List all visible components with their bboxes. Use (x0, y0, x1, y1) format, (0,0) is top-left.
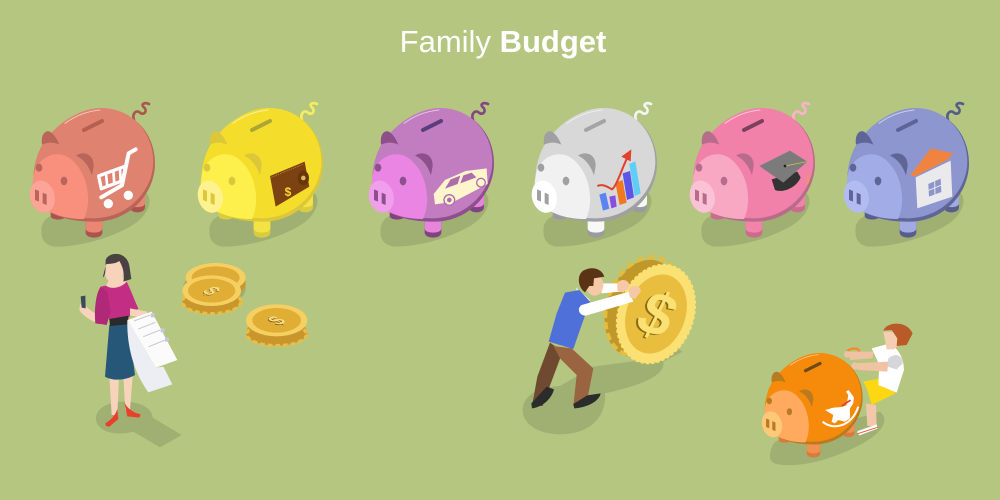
coins: two stacked gold coins: $ (197, 284, 226, 299)
piggy bank: house (periwinkle) (840, 103, 969, 247)
icon: growth chart (597, 149, 641, 211)
piggy bank: wallet (yellow) (194, 103, 323, 247)
piggy bank: education (pink) (686, 103, 815, 247)
icon: wallet (270, 162, 309, 207)
coin: single gold coin: $ (261, 314, 291, 328)
woman's shadow (96, 402, 182, 447)
figure: child holding pig tail (770, 324, 913, 465)
piggy bank: shopping (salmon) (26, 103, 155, 247)
icon: shopping cart (99, 149, 136, 206)
coins: two stacked gold coins: $ (197, 283, 227, 298)
receipt (127, 312, 177, 392)
icon: graduation cap (759, 151, 809, 191)
title: Family Budget (400, 24, 606, 59)
figure: woman holding phone and receipt (79, 254, 182, 447)
big coin (592, 246, 708, 374)
piggy bank: child's toys (orange) (759, 349, 863, 465)
piggy bank: car (purple) (365, 103, 494, 247)
man's shadow (523, 347, 683, 434)
icon: car (434, 168, 488, 205)
icon: house (910, 148, 953, 208)
piggy bank: investment chart (grey) (528, 103, 657, 247)
icon: wallet: $ (285, 185, 292, 199)
figure: man pushing big coin (523, 246, 708, 434)
big coin: $ (625, 278, 687, 351)
coin: single gold coin (246, 304, 307, 346)
coin: single gold coin: $ (262, 313, 291, 328)
icon: rocking horse (823, 390, 858, 426)
big coin: $ (627, 278, 689, 350)
shadow under pig and child (770, 412, 884, 465)
coins: two stacked gold coins (182, 263, 246, 314)
